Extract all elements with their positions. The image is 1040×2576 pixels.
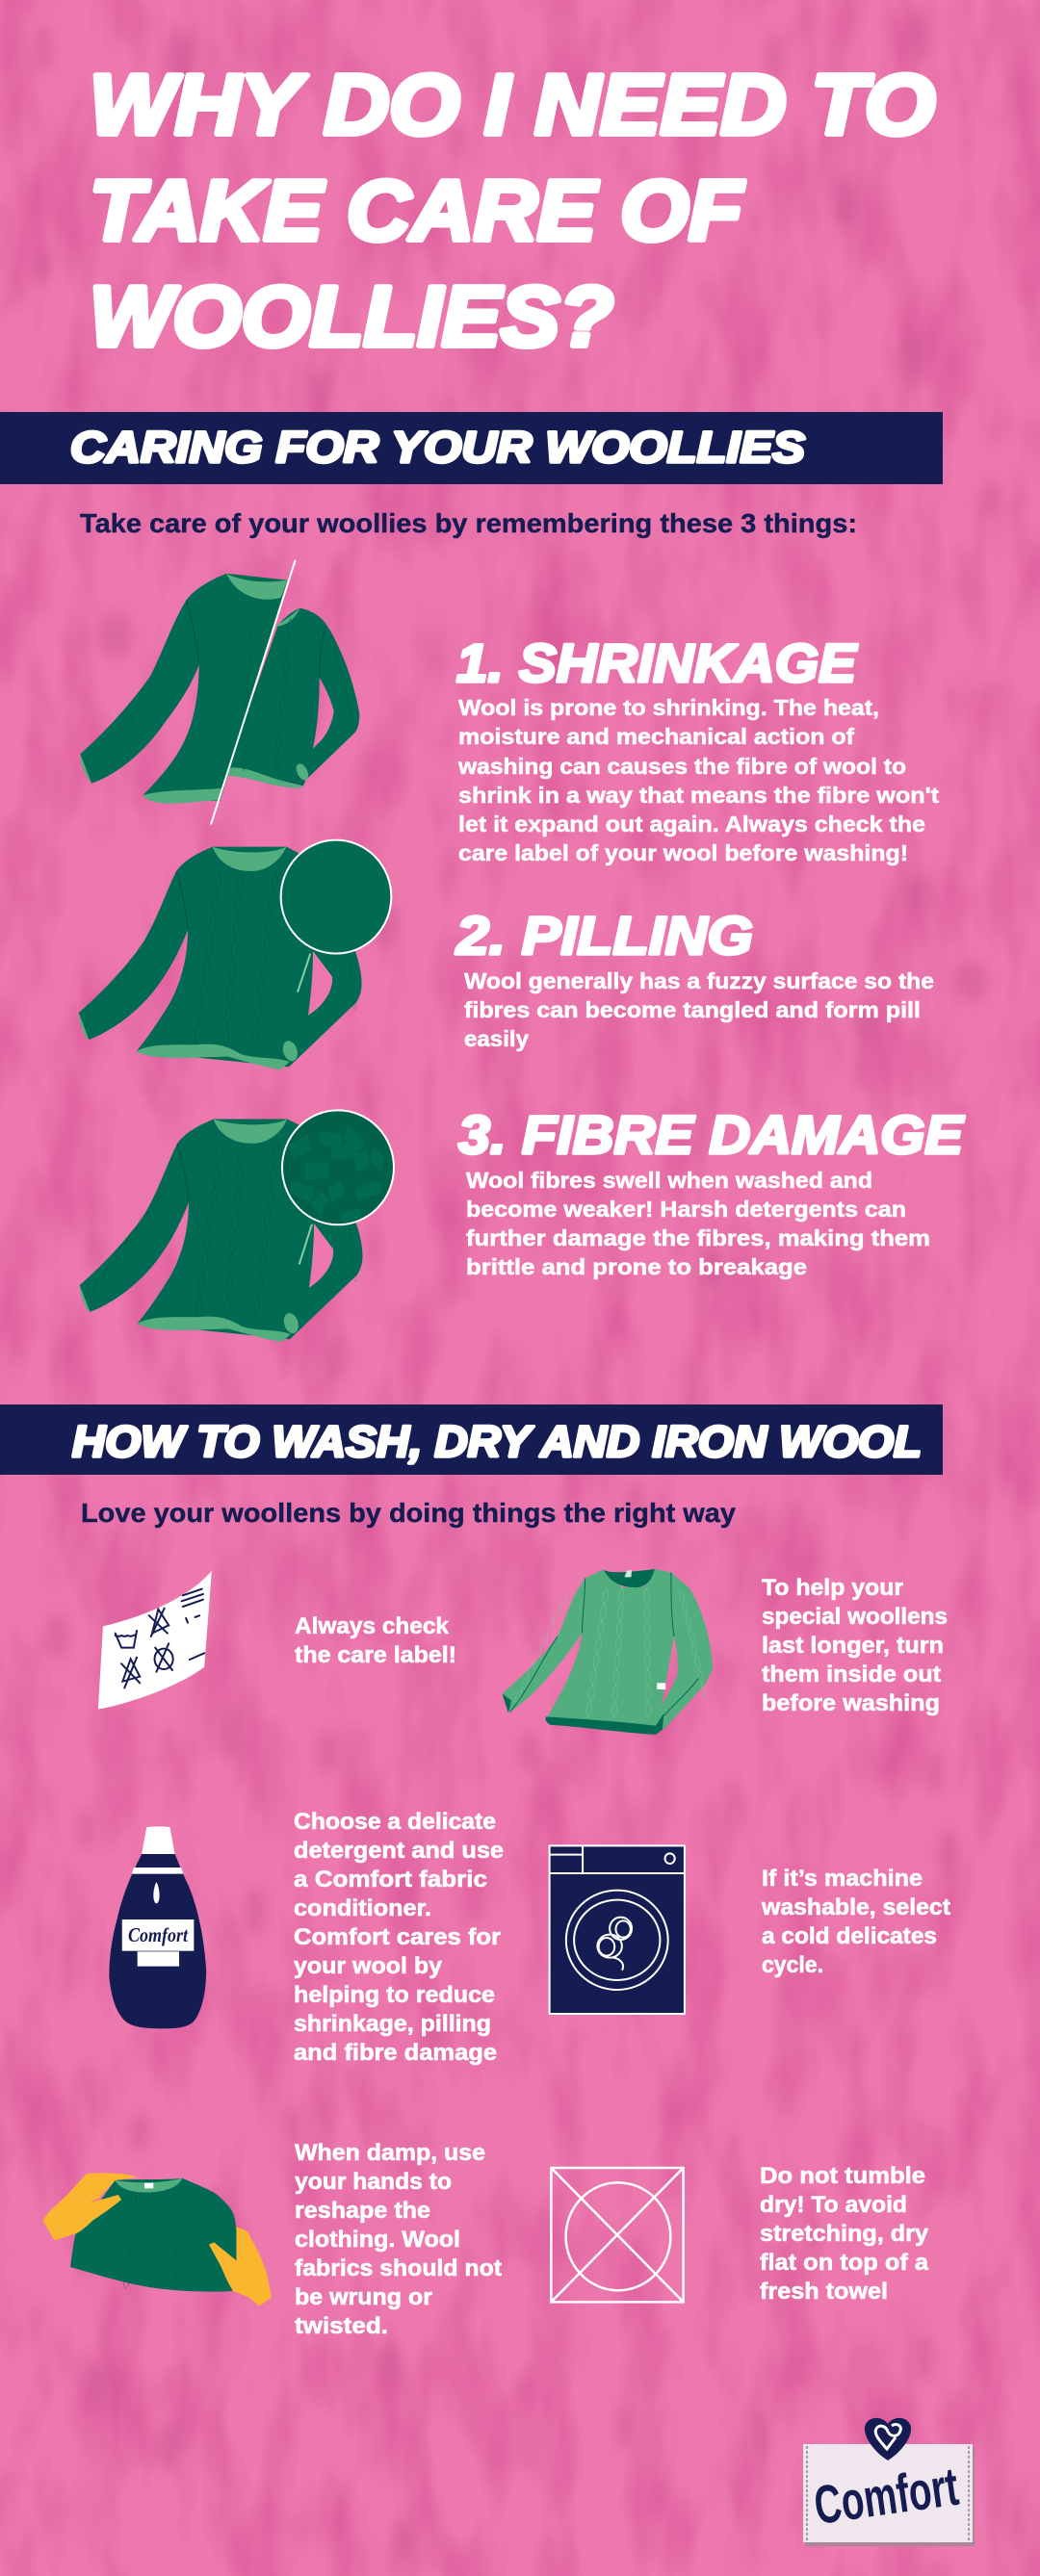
- text: do not tumble dry: stretching, dry: [760, 2221, 929, 2247]
- text: reshape when damp: twisted.: [295, 2313, 388, 2339]
- text: choose a delicate detergent: detergent and use: [294, 1838, 504, 1864]
- logo: comfort woven label: [803, 2418, 975, 2546]
- text: reshape when damp: [295, 2140, 502, 2339]
- text: reshape when damp: reshape the: [295, 2198, 430, 2224]
- title: WHY DO I NEED TO: [90, 57, 935, 152]
- text: turn inside out: before washing: [762, 1690, 940, 1716]
- text block: 1. shrinkage: washing can causes the fibre of wool to: [457, 754, 906, 779]
- illustration: shrunken sweater: [80, 560, 359, 825]
- text: do not tumble dry: flat on top of a: [760, 2250, 929, 2276]
- text: choose a delicate detergent: and fibre damage: [294, 2040, 497, 2066]
- text: cold delicates cycle: If it’s machine: [762, 1866, 923, 1892]
- text block: 3. fibre damage: [458, 1104, 965, 1279]
- text block: 2. pilling: [455, 905, 934, 1051]
- text: choose a delicate detergent: Choose a delicate: [294, 1809, 496, 1835]
- text: choose a delicate detergent: shrinkage, pilling: [294, 2011, 491, 2037]
- text block: 1. shrinkage: moisture and mechanical action of: [458, 724, 854, 749]
- text: do not tumble dry: [760, 2163, 929, 2305]
- text block: 2. pilling: 2. PILLING: [455, 905, 753, 966]
- icon: hands reshaping sweater: [43, 2173, 272, 2306]
- illustration: fibre damage sweater with magnifier: [80, 1110, 394, 1342]
- text: do not tumble dry: fresh towel: [760, 2279, 888, 2305]
- banner: caring for your woollies: [0, 412, 943, 484]
- text block: 2. pilling: fibres can become tangled and form pill: [464, 997, 921, 1022]
- icon: comfort bottle: [109, 1826, 206, 2028]
- text: turn inside out: them inside out: [762, 1662, 941, 1687]
- text: reshape when damp: When damp, use: [295, 2140, 485, 2166]
- text: turn inside out: [762, 1575, 948, 1716]
- text: choose a delicate detergent: helping to reduce: [294, 1982, 495, 2008]
- text: turn inside out: last longer, turn: [762, 1633, 944, 1659]
- logo heart: [865, 2418, 911, 2460]
- text: always check the care label: Always check: [295, 1613, 450, 1639]
- intro text: love your woollens: Love your woollens by doing things the right way: [81, 1498, 736, 1528]
- text block: 2. pilling: easily: [464, 1026, 529, 1051]
- text: do not tumble dry: Do not tumble: [760, 2163, 925, 2189]
- text: choose a delicate detergent: Comfort cares for: [294, 1924, 501, 1950]
- text: choose a delicate detergent: a Comfort fabric: [294, 1867, 487, 1893]
- text block: 1. shrinkage: shrink in a way that means the fibre won't: [458, 783, 939, 808]
- intro text: 3 things: Take care of your woollies by remembering these 3 things:: [80, 508, 857, 538]
- icon: comfort bottle: Comfort: [128, 1923, 189, 1946]
- text block: 1. shrinkage: Wool is prone to shrinking. The heat,: [458, 695, 879, 720]
- text: always check the care label: [295, 1613, 456, 1668]
- text block: 2. pilling: Wool generally has a fuzzy surface so the: [464, 968, 934, 993]
- banner: how to wash, dry and iron wool: HOW TO WASH, DRY AND IRON WOOL: [72, 1417, 922, 1466]
- icon: sweater turned inside out: [503, 1569, 713, 1735]
- text: cold delicates cycle: [761, 1866, 950, 1978]
- text: choose a delicate detergent: [294, 1809, 504, 2066]
- text block: 3. fibre damage: further damage the fibres, making them: [466, 1225, 930, 1250]
- banner: caring for your woollies: CARING FOR YOUR WOOLLIES: [70, 423, 805, 472]
- text: reshape when damp: fabrics should not: [295, 2255, 502, 2281]
- text: reshape when damp: clothing. Wool: [295, 2227, 460, 2253]
- text: turn inside out: To help your: [762, 1575, 903, 1601]
- text block: 3. fibre damage: 3. FIBRE DAMAGE: [458, 1104, 965, 1165]
- text block: 3. fibre damage: become weaker! Harsh detergents can: [466, 1197, 906, 1222]
- text: do not tumble dry: dry! To avoid: [760, 2192, 907, 2218]
- illustration: pilling sweater with magnifier: [79, 840, 391, 1069]
- text: choose a delicate detergent: your wool by: [294, 1953, 443, 1979]
- icon: do not tumble dry: [551, 2168, 684, 2302]
- logo wordmark: Comfort: [811, 2456, 962, 2536]
- text: cold delicates cycle: a cold delicates: [762, 1923, 937, 1949]
- title: WOOLLIES?: [90, 269, 613, 364]
- text block: 1. shrinkage: 1. SHRINKAGE: [456, 632, 858, 693]
- text: choose a delicate detergent: conditioner.: [294, 1895, 431, 1921]
- title: [90, 57, 935, 364]
- text: turn inside out: special woollens: [762, 1604, 948, 1630]
- title: TAKE CARE OF: [90, 163, 744, 258]
- text block: 1. shrinkage: care label of your wool before washing!: [458, 840, 908, 865]
- text: reshape when damp: be wrung or: [295, 2284, 432, 2310]
- text block: 3. fibre damage: brittle and prone to breakage: [466, 1254, 807, 1279]
- text block: 3. fibre damage: Wool fibres swell when washed and: [466, 1168, 872, 1193]
- text: cold delicates cycle: cycle.: [762, 1952, 823, 1978]
- text: always check the care label: the care label!: [295, 1642, 456, 1668]
- text block: 1. shrinkage: [456, 632, 939, 865]
- icon: washing machine: [550, 1845, 685, 2014]
- banner: how to wash, dry and iron wool: [0, 1404, 943, 1475]
- text: cold delicates cycle: washable, select: [761, 1894, 950, 1920]
- text block: 1. shrinkage: let it expand out again. Always check the: [458, 811, 925, 837]
- text: reshape when damp: your hands to: [295, 2169, 452, 2195]
- icon: care label: [98, 1571, 212, 1710]
